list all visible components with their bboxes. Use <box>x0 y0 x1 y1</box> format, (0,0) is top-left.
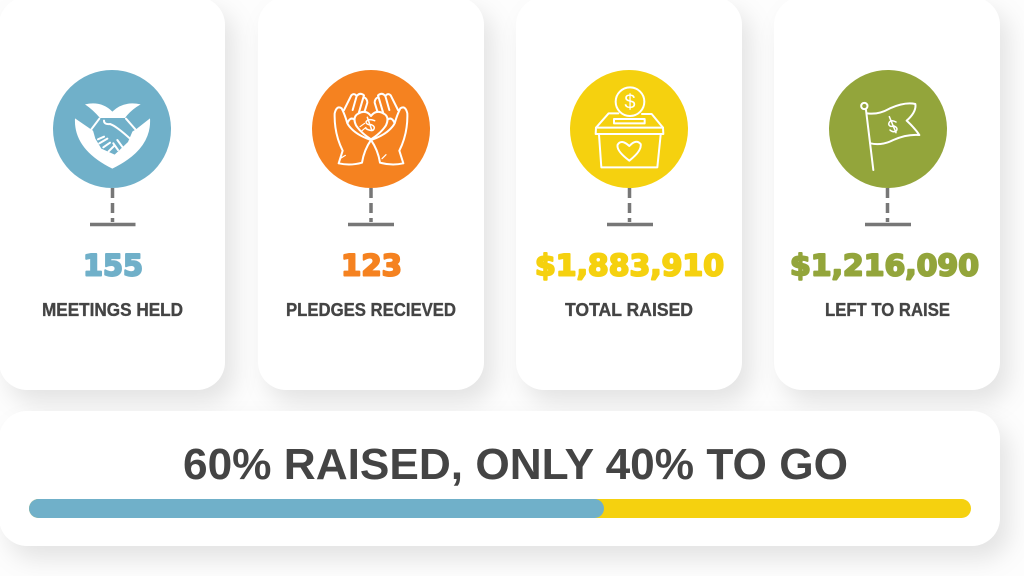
icon: flag <box>829 70 947 188</box>
icon: signpost stem <box>865 188 911 224</box>
icon: donation box <box>570 70 688 188</box>
panel: progress summary <box>0 411 1000 546</box>
label: PLEDGES RECIEVED <box>286 300 456 320</box>
label: LEFT TO RAISE <box>825 300 950 320</box>
icon: signpost stem <box>607 188 653 224</box>
heading: 60% RAISED, ONLY 40% TO GO <box>183 440 848 489</box>
icon: signpost stem <box>348 188 394 224</box>
label: MEETINGS HELD <box>42 300 183 320</box>
icon: signpost stem <box>90 188 136 224</box>
number: 123 <box>341 248 402 282</box>
panel: left to raise <box>774 0 1000 390</box>
icon: donation box: $ <box>624 92 636 114</box>
icon: hands holding heart <box>312 70 430 188</box>
panel: pledges received <box>258 0 484 390</box>
panel: total raised <box>516 0 742 390</box>
progress bar <box>29 499 971 518</box>
panel: meetings held <box>0 0 225 390</box>
icon: handshake heart <box>53 70 171 188</box>
number: $1,216,090 <box>790 248 979 282</box>
number: $1,883,910 <box>535 248 724 282</box>
number: 155 <box>83 248 143 282</box>
label: TOTAL RAISED <box>565 300 693 320</box>
